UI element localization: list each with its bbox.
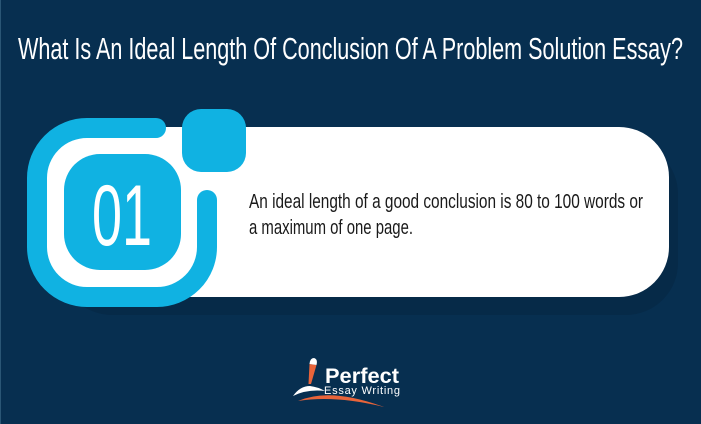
- logo swoosh: [298, 395, 384, 407]
- badge corner square: [182, 109, 246, 172]
- number badge: [37, 109, 246, 297]
- badge ring: [37, 128, 207, 297]
- badge number: 01: [92, 168, 152, 264]
- answer text: a maximum of one page.: [249, 216, 413, 239]
- logo tagline: Essay Writing: [324, 385, 400, 397]
- white panel: [37, 127, 669, 297]
- answer text: [249, 190, 643, 239]
- logo icon: pencil: [308, 358, 317, 384]
- logo: [293, 358, 400, 407]
- logo wordmark: Perfect: [325, 365, 399, 388]
- panel shadow: [60, 142, 678, 315]
- logo icon: open book: [293, 386, 325, 396]
- badge inner square: [64, 154, 181, 270]
- panel: answer card: [37, 109, 678, 315]
